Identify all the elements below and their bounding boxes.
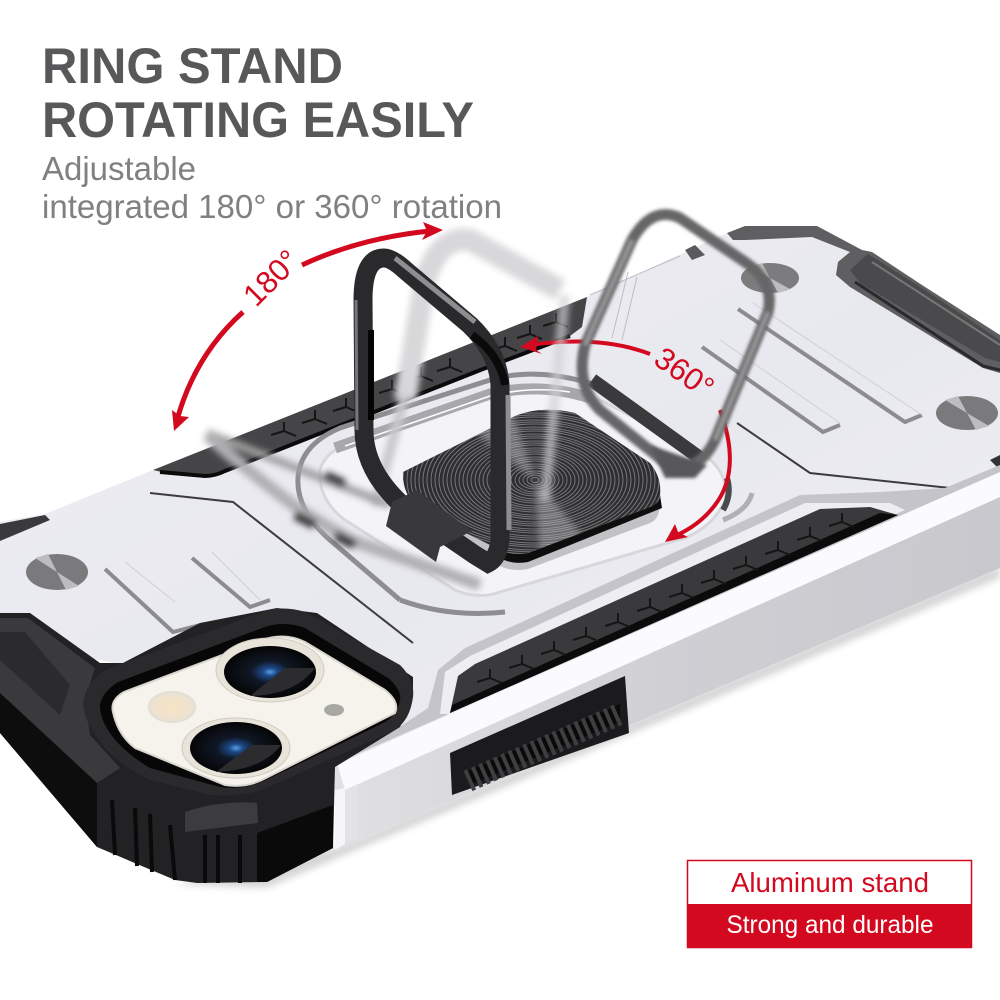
ring disc [402,410,660,554]
panel lines [150,423,950,643]
black corner bumper [0,608,413,883]
camera frame [83,608,413,795]
case back silver plate [0,227,1000,765]
phone case [0,226,1000,888]
title: ROTATING EASILY [42,92,474,148]
upper lens [216,638,324,702]
grooves [105,303,922,632]
ring hinge right [650,445,707,478]
ghost ring faint upper [375,240,565,505]
red arrow 360 upper [520,336,650,354]
right small bumper tab [990,455,1000,470]
microphone [324,704,344,716]
disc base [420,495,662,570]
callout: aluminum stand: Strong and durable [726,911,934,939]
callout: aluminum stand: Aluminum stand [731,867,929,898]
screw right [936,396,998,430]
camera inner rim [100,624,400,788]
lower bright bevel [440,503,905,714]
red arrow 360 lower [665,410,730,542]
callout: aluminum stand [687,860,972,948]
screw top [741,263,799,293]
title [42,38,474,148]
ring main [356,258,509,563]
red arrow 180 [172,222,443,431]
case side wall [335,472,1000,850]
subtitle: Adjustable [42,150,196,187]
lower lens [182,718,290,778]
small tab beside ring [685,245,705,260]
label 180 degrees: 180° [236,243,306,313]
ghost ring lying flat [207,433,480,585]
title: RING STAND [42,38,343,94]
recess dark band [592,380,729,510]
upper right bumper [727,226,1000,373]
screw left [26,554,88,590]
side button slot [450,676,629,795]
thin seam lines [590,256,680,340]
lower grey bevel [337,465,1000,763]
upper tread strip [153,297,587,477]
ring hinge [386,490,472,562]
lower tread strip [450,507,898,713]
subtitle: integrated 180° or 360° rotation [42,188,502,225]
label 360 degrees: 360° [648,340,721,406]
ghost ring right [582,214,769,467]
camera island glass [112,636,396,786]
left top bumper tab [0,515,50,541]
case shadow [175,565,1000,888]
flash [149,692,195,722]
subtitle [42,150,502,225]
stand recess [298,374,752,614]
